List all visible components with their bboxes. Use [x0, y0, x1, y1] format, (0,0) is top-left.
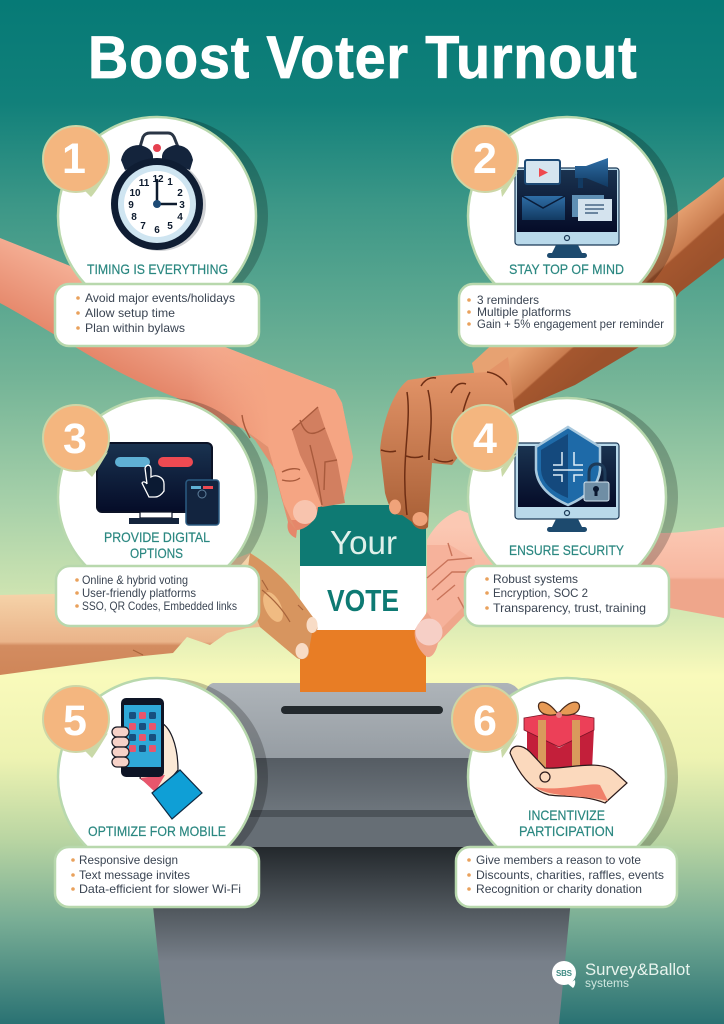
- text box: Robust systems: [493, 572, 578, 586]
- text box: Allow setup time: [85, 306, 175, 320]
- text box: [55, 847, 259, 907]
- ballot card: VOTE: [327, 583, 399, 618]
- text box: [55, 284, 259, 346]
- hand: bottom left: [0, 553, 318, 675]
- heading: [519, 807, 614, 839]
- hand: bottom right: [415, 510, 724, 657]
- number badge: [43, 126, 109, 197]
- text box: Multiple platforms: [477, 305, 571, 319]
- ballot box: [147, 683, 577, 1024]
- number badge: [452, 686, 518, 758]
- icon: alarm clock: 7: [140, 221, 146, 232]
- icon: monitor with media: [515, 158, 619, 258]
- ballot card: Your: [330, 524, 397, 561]
- text box: SSO, QR Codes, Embedded links: [82, 599, 237, 613]
- number badge: 4: [473, 415, 497, 463]
- ballot card: [300, 505, 426, 692]
- text box: Encryption, SOC 2: [493, 586, 588, 600]
- text box: Data-efficient for slower Wi-Fi: [79, 882, 241, 896]
- number badge: 5: [63, 697, 87, 745]
- heading: INCENTIVIZE: [528, 807, 605, 823]
- number badge: [452, 405, 518, 477]
- heading: OPTIONS: [130, 545, 183, 561]
- panel 6: incentives: [452, 678, 678, 907]
- icon: shield on monitor: [515, 427, 619, 532]
- text box: User-friendly platforms: [82, 586, 196, 600]
- text box: Transparency, trust, training: [493, 601, 646, 615]
- text box: Text message invites: [79, 868, 190, 882]
- icon: alarm clock: 11: [139, 178, 150, 189]
- panel 5: mobile: [43, 678, 268, 907]
- panel 1: timing: [43, 117, 268, 346]
- icon: alarm clock: 2: [177, 188, 183, 199]
- icon: alarm clock: [111, 133, 206, 251]
- logo: Survey & Ballot Systems: [552, 960, 690, 990]
- icon: alarm clock: 5: [167, 221, 173, 232]
- number badge: [452, 126, 518, 197]
- heading: TIMING IS EVERYTHING: [87, 261, 228, 277]
- icon: alarm clock: 4: [177, 212, 183, 223]
- number badge: 3: [63, 415, 87, 463]
- heading: PARTICIPATION: [519, 823, 614, 839]
- text box: [459, 284, 675, 346]
- number badge: [43, 405, 109, 477]
- text box: [456, 847, 677, 907]
- text box: Responsive design: [79, 853, 178, 867]
- heading: [104, 529, 210, 561]
- number badge: 6: [473, 697, 497, 745]
- hand: top left: [0, 238, 353, 538]
- heading: PROVIDE DIGITAL: [104, 529, 210, 545]
- heading: STAY TOP OF MIND: [509, 261, 624, 277]
- heading: ENSURE SECURITY: [509, 542, 625, 558]
- text box: Plan within bylaws: [85, 321, 185, 335]
- number badge: 2: [473, 135, 497, 183]
- logo: Survey & Ballot Systems: SBS: [556, 969, 573, 978]
- icon: voting screen and tablet: [97, 443, 219, 525]
- text box: Recognition or charity donation: [476, 882, 642, 896]
- text box: [56, 566, 259, 626]
- panel 3: digital options: [43, 398, 268, 626]
- icon: gift on hand: [510, 702, 627, 803]
- text box: Gain + 5% engagement per reminder: [477, 317, 664, 331]
- text box: [465, 566, 669, 626]
- title: Boost Voter Turnout: [88, 25, 637, 91]
- text box: 3 reminders: [477, 293, 539, 307]
- icon: alarm clock: 10: [129, 188, 141, 199]
- number badge: [43, 686, 109, 758]
- hand: top right: [380, 177, 724, 529]
- panel 2: top of mind: [452, 117, 678, 346]
- icon: alarm clock: 6: [154, 225, 160, 236]
- icon: alarm clock: 3: [179, 200, 185, 211]
- text box: Online & hybrid voting: [82, 573, 188, 587]
- icon: alarm clock: 8: [131, 212, 137, 223]
- text box: Give members a reason to vote: [476, 853, 641, 867]
- number badge: 1: [62, 135, 86, 183]
- icon: alarm clock: 1: [167, 177, 173, 188]
- icon: alarm clock: 12: [152, 174, 164, 185]
- heading: OPTIMIZE FOR MOBILE: [88, 823, 226, 839]
- logo: Survey & Ballot Systems: Survey&Ballot: [585, 960, 690, 979]
- icon: alarm clock: 9: [128, 200, 134, 211]
- text box: Avoid major events/holidays: [85, 291, 235, 305]
- icon: hand holding phone: [112, 698, 202, 819]
- text box: Discounts, charities, raffles, events: [476, 868, 664, 882]
- logo: Survey & Ballot Systems: systems: [585, 976, 629, 990]
- panel 4: security: [452, 398, 678, 626]
